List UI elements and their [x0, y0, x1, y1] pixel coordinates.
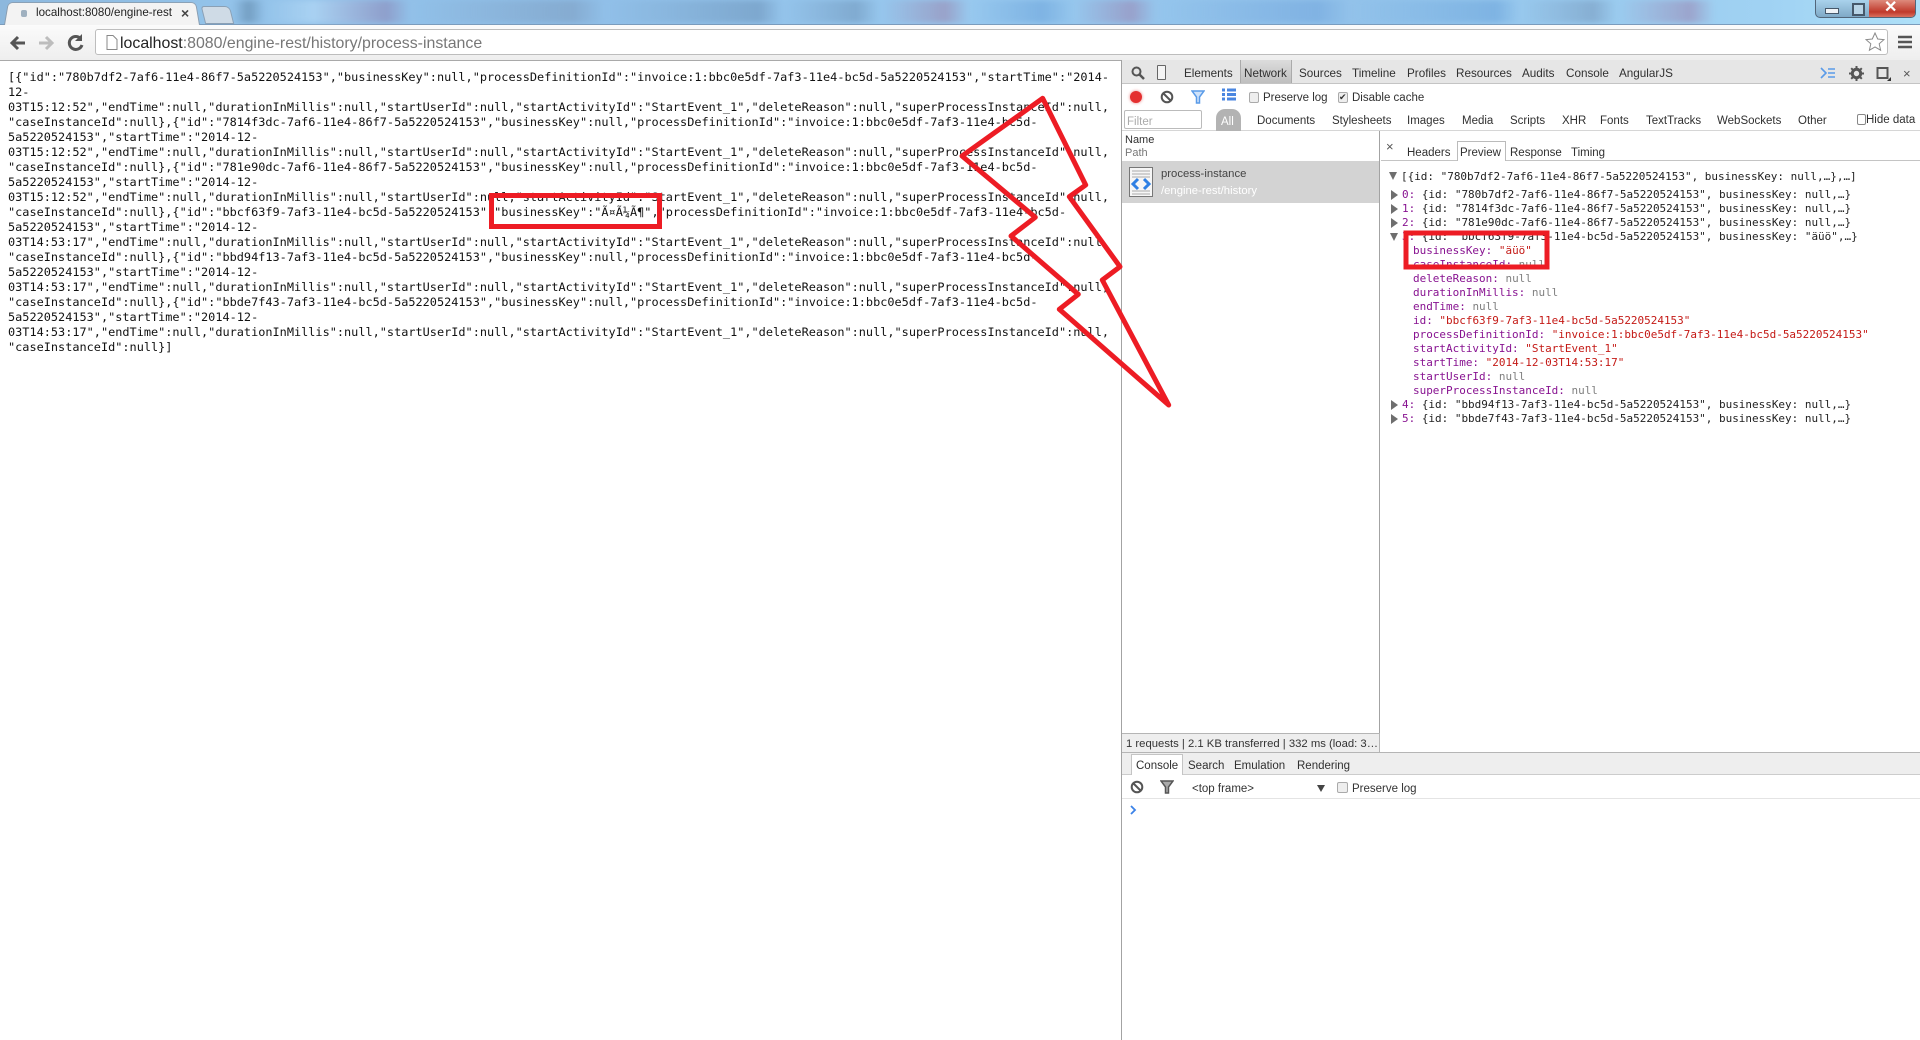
active network tab [1240, 60, 1292, 83]
close preview: × [1386, 139, 1394, 154]
tab labels: Timeline [1352, 67, 1396, 80]
icon: page [106, 35, 118, 50]
tab labels: Console [1566, 67, 1609, 80]
icon: clear [1160, 90, 1174, 104]
icon: html document [1129, 167, 1153, 197]
preview subtab labels: Timing [1571, 147, 1605, 159]
icon: console filter [1160, 780, 1174, 794]
drawer tab labels: Console [1136, 760, 1178, 772]
resource type labels: Stylesheets [1332, 115, 1391, 127]
panel: browser tab strip [0, 0, 1920, 25]
resource type labels: Media [1462, 115, 1493, 127]
tab labels: Resources [1456, 67, 1512, 80]
console preserve label: Preserve log [1352, 783, 1417, 795]
panel: browser toolbar [0, 25, 1920, 61]
icon: settings gear [1849, 66, 1864, 81]
address bar [95, 29, 1888, 55]
all label: All [1221, 116, 1234, 128]
console drawer [1122, 752, 1920, 1040]
tab labels: AngularJS [1619, 67, 1673, 80]
expanded object properties: businessKey: "äüö" caseInstanceId: null deleteReason: null durationInMillis: null endTime: null id: "bbcf63f9-7af3-11e4-bc5d-5a5220524153" processDefinitionId: "invoice:1:bbc0e5df-7af3-11e4-bc5d-5a5220524153" startActivityId: "StartEvent_1" startTime: "2014-12-03T14:53:17" startUserId: null superProcessInstanceId: null [1413, 244, 1869, 397]
minimise glyph [1825, 8, 1839, 14]
icon: reload [68, 34, 84, 51]
active console tab [1131, 754, 1183, 775]
preview subtab labels: Response [1510, 147, 1562, 159]
new tab button [201, 6, 234, 24]
disable cache checkbox [1338, 92, 1348, 103]
selected request row [1122, 161, 1379, 203]
console controls row [1122, 775, 1920, 799]
drawer tab labels: Rendering [1297, 760, 1350, 772]
icon: drawer toggle [1820, 67, 1835, 79]
highlight: correct business key [1406, 233, 1547, 267]
rows 0 to 3: 0: {id: "780b7df2-7af6-11e4-86f7-5a5220524153", businessKey: null,…} 1: {id: "7814f3dc-7af6-11e4-86f7-5a5220524153", businessKey: null,…} 2: {id: "781e90dc-7af6-11e4-86f7-5a5220524153", businessKey: null,…} 3: {id: "bbcf63f9-7af3-11e4-bc5d-5a5220524153", businessKey: "äüö",…} [1402, 188, 1858, 243]
drawer tab bar [1122, 753, 1920, 775]
active preview tab [1457, 141, 1506, 161]
icon: bookmark star [1865, 32, 1885, 52]
collapsed triangles lower [1391, 400, 1398, 424]
resource type labels: WebSockets [1717, 115, 1781, 127]
icon: inspect search [1132, 66, 1145, 80]
request name: process-instance [1161, 168, 1246, 180]
icon: forward arrow [39, 36, 54, 50]
resource type labels [1257, 115, 1827, 127]
json preview tree [1389, 170, 1869, 425]
icon: clear console [1130, 780, 1144, 794]
arrow: red lightning bolt [962, 98, 1169, 405]
tab labels [1184, 67, 1673, 80]
tab labels: Network [1244, 67, 1287, 80]
network status bar [1122, 733, 1380, 752]
resource filter row [1122, 107, 1920, 131]
console preserve checkbox [1337, 782, 1348, 793]
icon: device [1157, 65, 1166, 80]
preserve log checkbox [1249, 92, 1259, 103]
response subtab bar [1381, 131, 1920, 161]
tab favicon [21, 10, 27, 17]
disable cache checkbox: ✔ [1339, 92, 1347, 102]
resource type labels: Documents [1257, 115, 1315, 127]
rows 4 and 5: 4: {id: "bbd94f13-7af3-11e4-bc5d-5a5220524153", businessKey: null,…} 5: {id: "bbde7f43-7af3-11e4-bc5d-5a5220524153", businessKey: null,…} [1402, 398, 1851, 425]
tab labels: Audits [1522, 67, 1554, 80]
preview subtab labels: Preview [1460, 147, 1501, 159]
resource type labels: Images [1407, 115, 1445, 127]
JSON response text: [{"id":"780b7df2-7af6-11e4-86f7-5a5220524153","businessKey":null,"processDefinitionId":"invoice:1:bbc0e5df-7af3-11e4-bc5d-5a5220524153","startTime":"2014- 12- 03T15:12:52","endTime":null,"durationInMillis":null,"startUserId":null,"startActivityId":"StartEvent_1","deleteReason":null,"superProcessInstanceId":null, "caseInstanceId":null},{"id":"7814f3dc-7af6-11e4-86f7-5a5220524153","businessKey":null,"processDefinitionId":"invoice:1:bbc0e5df-7af3-11e4-bc5d- 5a5220524153","startTime":"2014-12- 03T15:12:52","endTime":null,"durationInMillis":null,"startUserId":null,"startActivityId":"StartEvent_1","deleteReason":null,"superProcessInstanceId":null, "caseInstanceId":null},{"id":"781e90dc-7af6-11e4-86f7-5a5220524153","businessKey":null,"processDefinitionId":"invoice:1:bbc0e5df-7af3-11e4-bc5d- 5a5220524153","startTime":"2014-12- 03T15:12:52","endTime":null,"durationInMillis":null,"startUserId":null,"startActivityId":"StartEvent_1","deleteReason":null,"superProcessInstanceId":null, "caseInstanceId":null},{"id":"bbcf63f9-7af3-11e4-bc5d-5a5220524153","businessKey":"Ã¤Ã¼Ã¶","processDefinitionId":"invoice:1:bbc0e5df-7af3-11e4-bc5d- 5a5220524153","startTime":"2014-12- 03T14:53:17","endTime":null,"durationInMillis":null,"startUserId":null,"startActivityId":"StartEvent_1","deleteReason":null,"superProcessInstanceId":null, "caseInstanceId":null},{"id":"bbd94f13-7af3-11e4-bc5d-5a5220524153","businessKey":null,"processDefinitionId":"invoice:1:bbc0e5df-7af3-11e4-bc5d- 5a5220524153","startTime":"2014-12- 03T14:53:17","endTime":null,"durationInMillis":null,"startUserId":null,"startActivityId":"StartEvent_1","deleteReason":null,"superProcessInstanceId":null, "caseInstanceId":null},{"id":"bbde7f43-7af3-11e4-bc5d-5a5220524153","businessKey":null,"processDefinitionId":"invoice:1:bbc0e5df-7af3-11e4-bc5d- 5a5220524153","startTime":"2014-12- 03T14:53:17","endTime":null,"durationInMillis":null,"startUserId":null,"startActivityId":"StartEvent_1","deleteReason":null,"superProcessInstanceId":null, "caseInstanceId":null}] [8, 70, 1109, 354]
address text: localhost:8080/engine-rest/history/process-instance [120, 35, 482, 52]
disable cache label: Disable cache [1352, 92, 1424, 104]
highlight: garbled business key [492, 196, 660, 226]
drawer tab labels [1136, 760, 1350, 772]
tab title: localhost:8080/engine-rest [36, 6, 172, 19]
icon: record [1130, 91, 1142, 103]
tab labels: Profiles [1407, 67, 1446, 80]
console prompt [1130, 805, 1136, 815]
icon: filter [1191, 90, 1205, 104]
filter input [1124, 110, 1202, 129]
preview subtab labels [1407, 147, 1605, 159]
icon: back arrow [10, 36, 25, 50]
drawer tab labels: Emulation [1234, 760, 1285, 772]
request path: /engine-rest/history [1161, 185, 1257, 197]
resource type labels: Scripts [1510, 115, 1545, 127]
all pill [1216, 109, 1241, 131]
status text: 1 requests | 2.1 KB transferred | 332 ms (load: 3… [1126, 738, 1378, 750]
root triangle [1389, 172, 1397, 180]
name header: Name [1125, 134, 1154, 146]
window controls [1815, 0, 1916, 18]
path header: Path [1125, 147, 1148, 159]
filter placeholder: Filter [1127, 116, 1153, 128]
hide data label: Hide data [1866, 114, 1915, 126]
collapsed triangles [1390, 190, 1398, 241]
preview subtab labels: Headers [1407, 147, 1450, 159]
close devtools: × [1903, 66, 1911, 81]
drawer tab labels: Search [1188, 760, 1224, 772]
restore glyph [1852, 3, 1865, 16]
resource type labels: XHR [1562, 115, 1586, 127]
frame selector arrow [1317, 785, 1325, 792]
tab labels: Elements [1184, 67, 1233, 80]
preserve log label: Preserve log [1263, 92, 1328, 104]
close button [1869, 0, 1916, 17]
icon: list view [1222, 88, 1236, 100]
resource type labels: TextTracks [1646, 115, 1701, 127]
hide data checkbox [1857, 114, 1866, 125]
resource type labels: Fonts [1600, 115, 1629, 127]
tab close: × [181, 5, 189, 21]
resource type labels: Other [1798, 115, 1827, 127]
network controls row [1128, 88, 1424, 105]
tab labels: Sources [1299, 67, 1342, 80]
root row: [{id: "780b7df2-7af6-11e4-86f7-5a5220524153", businessKey: null,…},…] [1401, 170, 1857, 183]
frame selector text: <top frame> [1192, 783, 1254, 795]
icon: menu [1898, 36, 1912, 48]
panel: request list [1122, 131, 1380, 733]
panel: developer tools [1121, 60, 1920, 1040]
devtools tab bar [1122, 60, 1920, 84]
icon: dock [1876, 67, 1891, 81]
blurred desktop colour streaks [200, 0, 1820, 23]
active tab [4, 2, 200, 25]
